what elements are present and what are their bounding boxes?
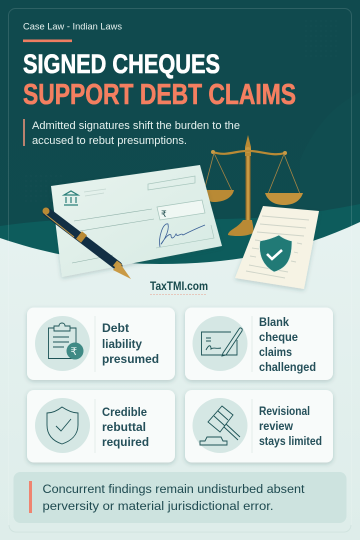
header tag: Case Law - Indian Laws [23, 22, 122, 32]
subtitle: accused to rebut presumptions. [32, 135, 187, 147]
illustration: pen [42, 208, 131, 279]
card: debt liability: Debt [102, 321, 129, 335]
accent rule [23, 40, 72, 42]
icon: bank [64, 191, 78, 205]
card: revisional review [185, 390, 333, 462]
icon: gavel [200, 406, 240, 445]
title [23, 49, 296, 111]
brand: TaxTMI.com: TaxTMI.com [150, 279, 208, 293]
rupee symbol: ₹ [161, 210, 167, 220]
illustration: document with shield [235, 206, 319, 289]
card: credible rebuttal: rebuttal [102, 420, 146, 434]
icon: clipboard rupee [48, 323, 84, 360]
card: debt liability [27, 308, 175, 380]
icon: scales of justice [200, 135, 303, 236]
card: credible rebuttal: required [102, 435, 149, 449]
illustration: cheque [51, 165, 222, 277]
callout [14, 472, 346, 523]
card: blank cheque: Blank [259, 315, 289, 329]
card: blank cheque: cheque [259, 330, 298, 344]
card: credible rebuttal: Credible [102, 405, 147, 419]
card: revisional review: Revisional [259, 404, 310, 418]
title line 2: SUPPORT DEBT CLAIMS [23, 79, 296, 111]
icon: shield check [260, 235, 292, 272]
card: revisional review: review [259, 419, 294, 433]
icon: shield check [47, 407, 78, 444]
subtitle [23, 119, 240, 147]
title line 1: SIGNED CHEQUES [23, 49, 220, 79]
icon: clipboard rupee: ₹ [70, 346, 78, 358]
card: blank cheque: challenged [259, 360, 316, 374]
subtitle: Admitted signatures shift the burden to the [32, 120, 240, 132]
card: blank cheque [185, 308, 333, 380]
icon: cheque and pen [202, 328, 242, 356]
card: debt liability: presumed [102, 352, 159, 366]
card: blank cheque: claims [259, 345, 292, 359]
card: revisional review: stays limited [259, 434, 322, 448]
callout: perversity or material jurisdictional error. [42, 499, 274, 513]
card: credible rebuttal [27, 390, 175, 462]
callout: Concurrent findings remain undisturbed absent [42, 482, 305, 496]
card: debt liability: liability [102, 337, 142, 351]
